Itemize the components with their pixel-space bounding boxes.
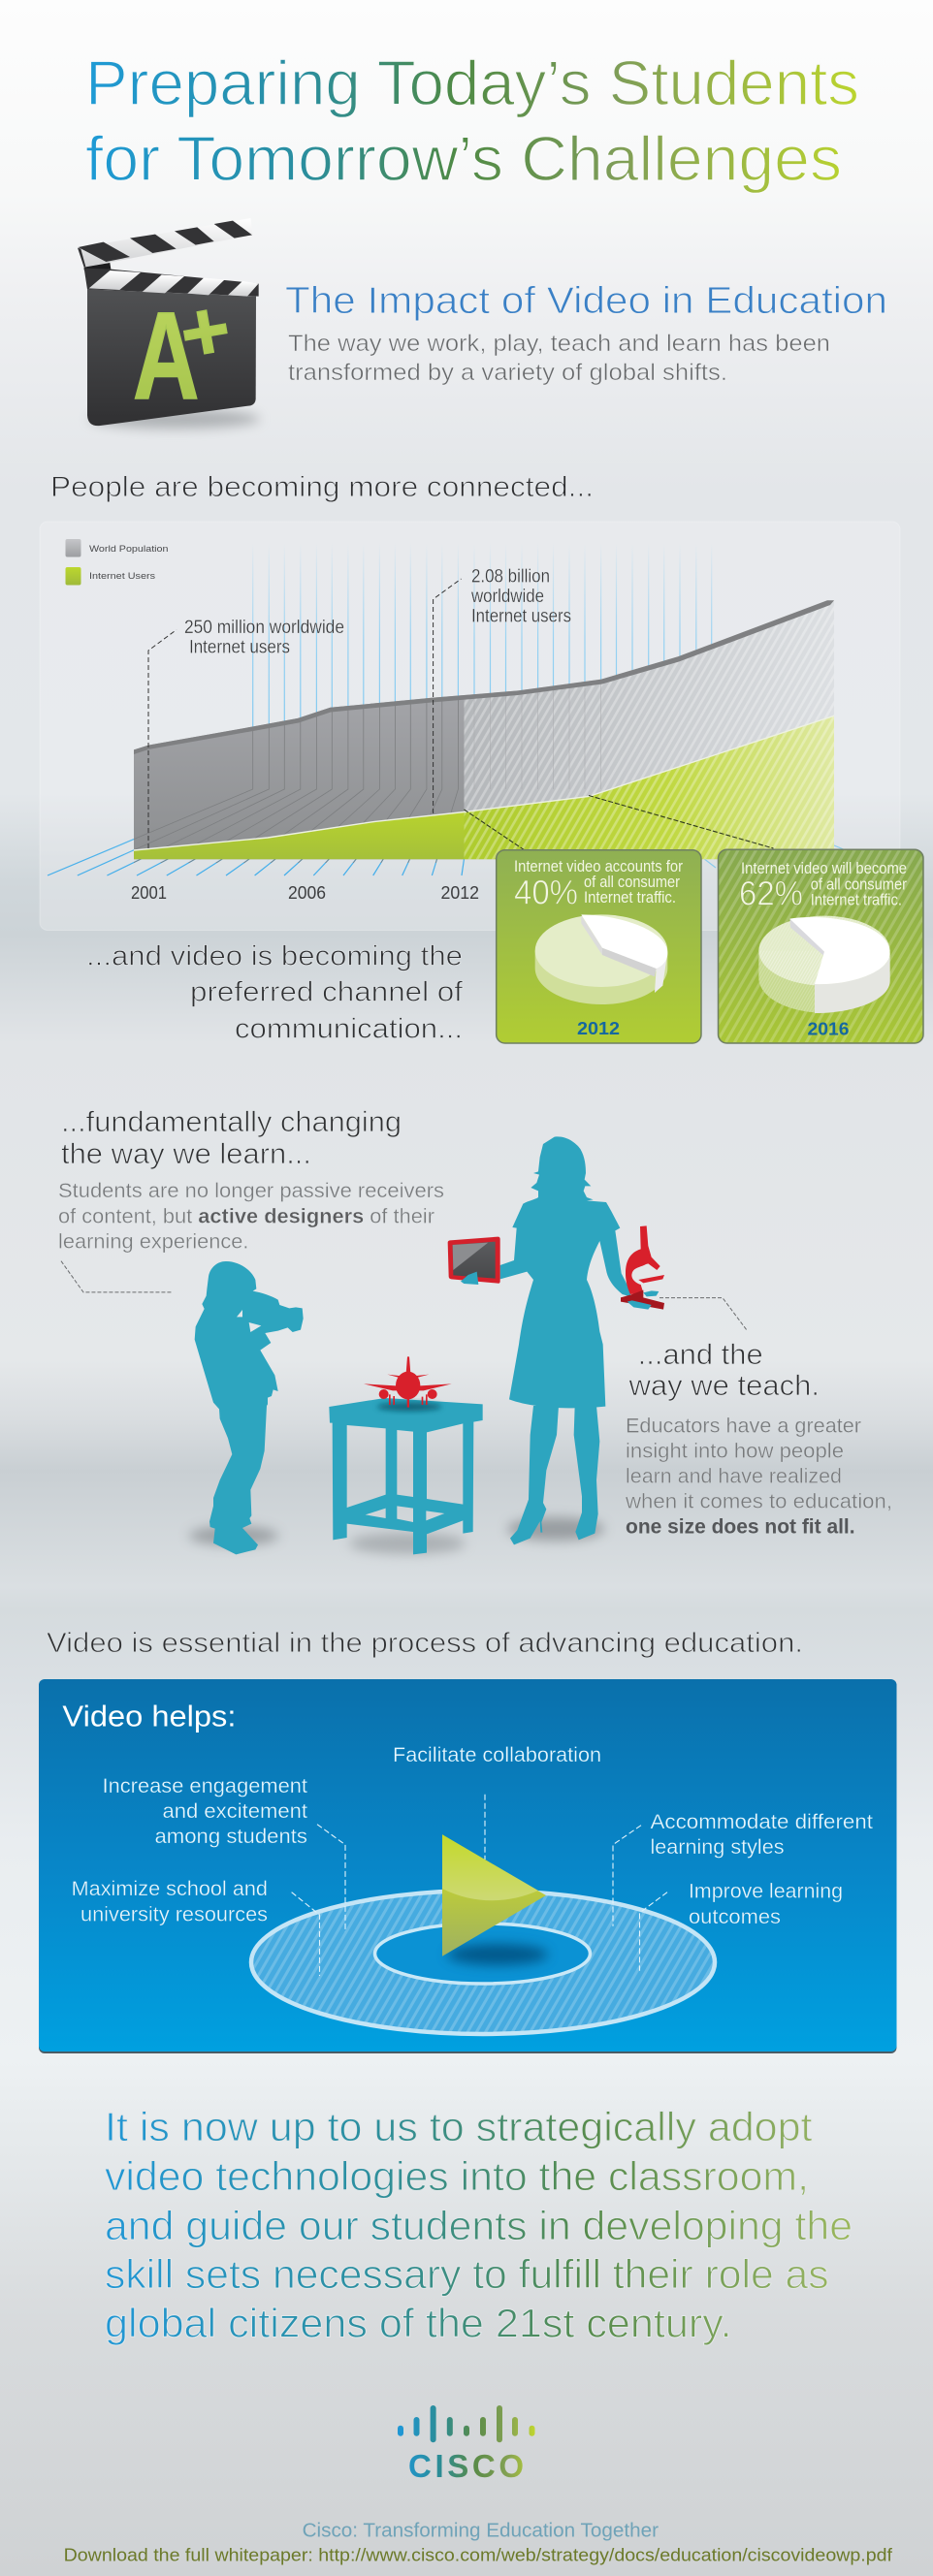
- callout: 2.08 billion: worldwide: [470, 587, 544, 607]
- text: educators: insight into how people: [626, 1441, 844, 1463]
- callout: 250 million: [148, 618, 344, 848]
- title: [85, 48, 859, 194]
- benefit labels: Facilitate collaboration: [393, 1744, 601, 1766]
- dashed leader: student: [61, 1261, 173, 1292]
- year labels: 2001: [131, 883, 167, 903]
- title: Preparing Today’s Students: [85, 48, 859, 118]
- intro text: transformed by a variety of global shifts.: [288, 360, 727, 386]
- closing statement: video technologies into the classroom,: [105, 2153, 809, 2199]
- footer link text: Download the full whitepaper: http://www.cisco.com/web/strategy/docs/education/ciscovideowp.pdf: [64, 2545, 893, 2565]
- heading: and the way we teach: ...and the: [638, 1339, 763, 1371]
- figure: student with camera: [189, 1261, 304, 1554]
- pie chart 62%: [758, 916, 890, 1013]
- green area: internet users: [134, 716, 834, 859]
- dashed leader: teacher: [660, 1298, 747, 1330]
- card: 2016 pie: Internet video will become: [741, 859, 907, 877]
- heading: people connected: People are becoming more connected...: [50, 471, 594, 503]
- text: educators: when it comes to education,: [625, 1490, 892, 1512]
- logo: Cisco: [398, 2405, 535, 2484]
- benefit labels: university resources: [80, 1904, 268, 1926]
- card: 2016 pie: Internet traffic.: [811, 891, 902, 909]
- closing statement: and guide our students in developing the: [105, 2203, 853, 2248]
- benefit labels: Accommodate different: [650, 1811, 873, 1833]
- callout: 2.08 billion: Internet users: [471, 606, 571, 626]
- text: video preferred channel: preferred channel of: [190, 976, 464, 1007]
- callout: 250 million: Internet users: [189, 638, 290, 658]
- target rings: [250, 1890, 716, 2035]
- text: educators: one size does not fit all.: [626, 1515, 855, 1538]
- microscope: [621, 1225, 664, 1310]
- icon: play triangle: [442, 1834, 548, 1965]
- benefit labels: and excitement: [163, 1800, 307, 1823]
- A+ lettering: [133, 281, 238, 425]
- benefit labels: learning styles: [650, 1836, 784, 1859]
- card: 2012 pie: of all consumer: [584, 873, 680, 891]
- heading: video is essential: Video is essential in the process of advancing education.: [47, 1628, 803, 1659]
- panel: connectivity chart: [40, 522, 900, 931]
- text: students: [58, 1180, 444, 1253]
- benefit labels: outcomes: [689, 1906, 781, 1928]
- callout: 2.08 billion: 2.08 billion: [471, 567, 550, 588]
- floor and grid lines: [48, 543, 846, 875]
- text: educators: Educators have a greater: [626, 1415, 861, 1437]
- heading: changing the way we learn: [61, 1106, 402, 1170]
- callout: 2.08 billion: [434, 567, 571, 813]
- card: 2012 pie: 2012: [577, 1018, 620, 1038]
- text: educators: [625, 1415, 892, 1538]
- legend: World Population: [89, 544, 169, 555]
- figure: table with model plane: [329, 1356, 483, 1554]
- heading: and the way we teach: [627, 1339, 820, 1402]
- card: 2016 pie: [718, 849, 923, 1043]
- text: video preferred channel: [86, 940, 464, 1045]
- benefit labels: among students: [155, 1826, 307, 1848]
- year labels: [131, 883, 479, 903]
- closing statement: [105, 2104, 853, 2346]
- card: 2012 pie: Internet video accounts for: [514, 857, 683, 875]
- benefit labels: Maximize school and: [72, 1878, 268, 1900]
- callout: 250 million: 250 million worldwide: [184, 618, 344, 638]
- A+ lettering: A: [133, 286, 199, 425]
- text: students: learning experience.: [58, 1231, 248, 1253]
- card: 2016 pie: 62%: [739, 875, 803, 912]
- A+ lettering: +: [174, 281, 238, 382]
- icon: clapperboard with A+: [78, 218, 260, 429]
- connector lines to cards: [464, 795, 774, 850]
- dashed leaders: [292, 1795, 667, 1976]
- year labels: 2012: [440, 883, 479, 903]
- year labels: 2006: [288, 883, 326, 903]
- card: 2016 pie: of all consumer: [811, 875, 907, 894]
- gray area: world population: [134, 600, 834, 863]
- figure: teacher: [448, 1136, 664, 1544]
- pie chart 40%: [535, 914, 667, 1004]
- legend: Internet Users: [89, 571, 155, 582]
- closing statement: global citizens of the 21st century.: [105, 2301, 732, 2346]
- heading: changing the way we learn: ...fundamentally changing: [61, 1106, 402, 1138]
- text: students: Students are no longer passive receivers: [58, 1180, 444, 1202]
- card: 2012 pie: 40%: [514, 874, 578, 911]
- closing statement: It is now up to us to strategically adopt: [105, 2104, 813, 2149]
- table: [329, 1398, 483, 1554]
- plane: [364, 1356, 452, 1408]
- benefit labels: Increase engagement: [103, 1775, 307, 1797]
- card: 2012 pie: Internet traffic.: [584, 888, 676, 906]
- text: video preferred channel: ...and video is becoming the: [86, 940, 463, 971]
- text: educators: learn and have realized: [626, 1465, 842, 1487]
- heading: changing the way we learn: the way we learn...: [61, 1138, 311, 1170]
- title: for Tomorrow’s Challenges: [85, 123, 842, 194]
- card: 2012 pie: [497, 850, 701, 1043]
- text: students: of content, but active designers of their: [58, 1205, 434, 1227]
- footer tagline: Cisco: Transforming Education Together: [303, 2521, 659, 2542]
- benefit labels: Improve learning: [689, 1881, 843, 1903]
- closing statement: skill sets necessary to fulfill their role as: [105, 2251, 829, 2297]
- heading: and the way we teach: way we teach.: [627, 1370, 820, 1402]
- panel: video helps: [39, 1679, 896, 2053]
- intro text: [288, 331, 830, 386]
- intro text: The way we work, play, teach and learn has been: [288, 331, 830, 357]
- logo: Cisco: CISCO: [408, 2448, 524, 2484]
- tablet: [448, 1237, 500, 1285]
- text: video preferred channel: communication...: [235, 1014, 463, 1045]
- subtitle: The Impact of Video in Education: The Impact of Video in Education: [285, 280, 887, 322]
- legend: [66, 539, 169, 586]
- panel heading: Video helps:: [62, 1700, 236, 1733]
- benefit labels: [72, 1744, 873, 1928]
- card: 2016 pie: 2016: [807, 1019, 850, 1039]
